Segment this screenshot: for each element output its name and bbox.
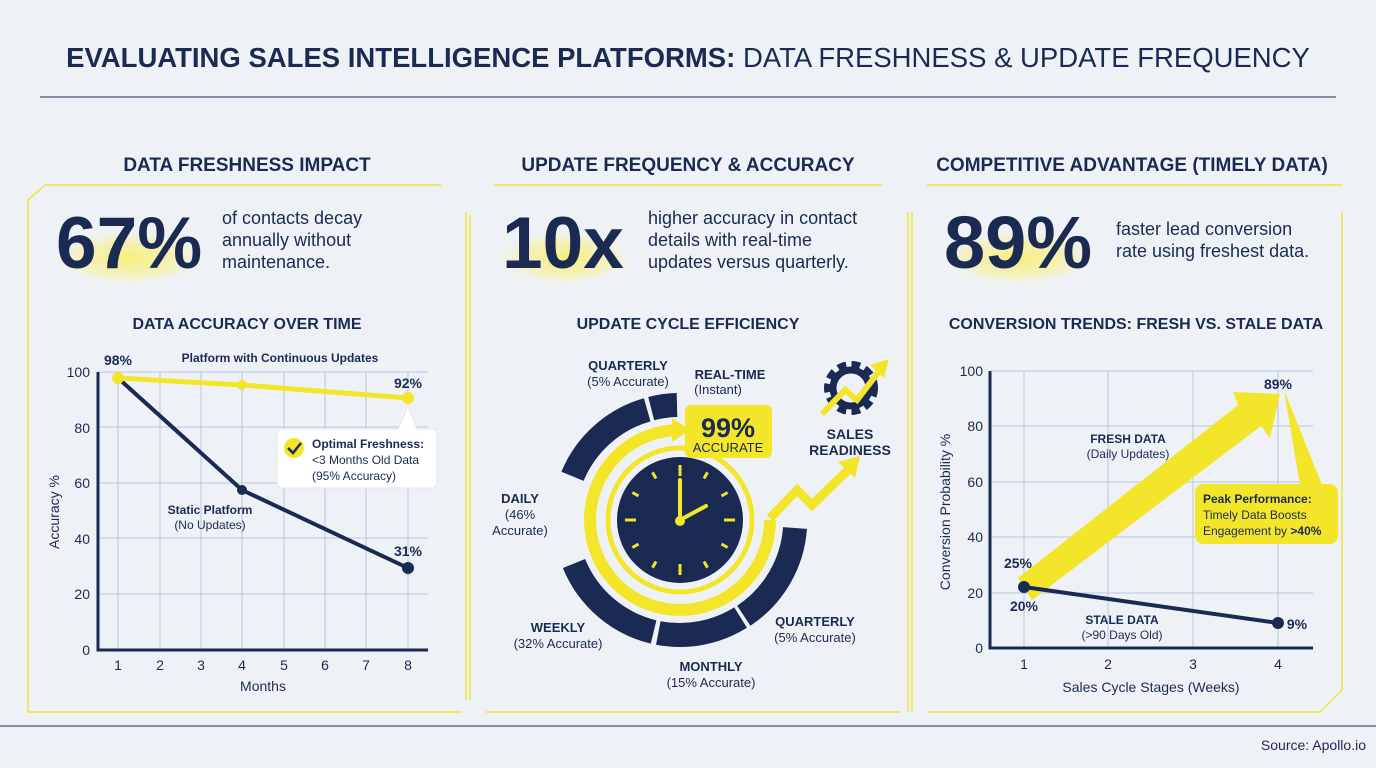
big stat 10x: 10x [502,203,624,284]
callout: 99% accurate: 99% [701,413,755,443]
line chart: accuracy over time: 1 [114,657,122,673]
radial chart: update cycle: MONTHLY [679,659,743,674]
icon: gear with rising arrow [809,359,891,458]
line chart: accuracy over time: 8 [404,657,412,673]
line chart: accuracy over time: Platform with Continuous Updates [182,351,379,365]
line chart: accuracy over time: 31% [394,543,423,559]
line chart: accuracy over time: 2 [156,657,164,673]
radial chart: update cycle: (Instant) [694,382,742,397]
line chart: conversion trends: 3 [1189,656,1197,672]
chart heading: CONVERSION TRENDS: FRESH VS. STALE DATA [949,316,1324,333]
line chart: accuracy over time: 7 [362,657,370,673]
panel: data freshness impact [45,155,437,694]
line chart: conversion trends: 60 [967,474,983,490]
line chart: accuracy over time: 98% [104,352,133,368]
line chart: accuracy over time: 60 [74,475,90,491]
stat description: higher accuracy in contact [648,208,857,228]
line chart: conversion trends: 20 [967,585,983,601]
radial chart: update cycle: (5% Accurate) [587,374,669,389]
callout: optimal freshness [277,406,437,488]
callout: peak performance [1195,390,1338,544]
line chart: conversion trends: (Daily Updates) [1087,447,1169,461]
line chart: conversion trends [937,363,1338,695]
line chart: conversion trends: 25% [1004,555,1033,571]
line chart: accuracy over time [46,351,437,694]
radial chart: update cycle: DAILY [501,491,539,506]
line chart: conversion trends: 100 [960,363,983,379]
line chart: accuracy over time: Static Platform [168,503,252,517]
line chart: conversion trends: 40 [967,529,983,545]
line chart: accuracy over time: 4 [238,657,246,673]
heading: competitive advantage: COMPETITIVE ADVANTAGE (TIMELY DATA) [936,155,1328,176]
callout: optimal freshness: (95% Accuracy) [312,469,396,483]
stat description: of contacts decay [222,208,362,228]
radial chart: update cycle: REAL-TIME [695,367,766,382]
line chart: accuracy over time: 80 [74,420,90,436]
line chart: conversion trends: (>90 Days Old) [1081,628,1163,642]
callout: peak performance: Timely Data Boosts [1203,508,1307,522]
line chart: conversion trends: Sales Cycle Stages (Weeks) [1062,679,1240,695]
callout: optimal freshness: <3 Months Old Data [312,453,419,467]
radial chart: update cycle: (46% [505,507,536,522]
line chart: conversion trends: STALE DATA [1085,613,1159,627]
line chart: conversion trends: 80 [967,418,983,434]
panel: competitive advantage [933,155,1338,695]
radial chart: update cycle: WEEKLY [531,620,586,635]
callout: optimal freshness: Optimal Freshness: [312,437,424,451]
line chart: accuracy over time: Accuracy % [46,475,62,549]
stat description: faster lead conversion [1116,219,1292,239]
stat description: annually without [222,230,351,250]
panel: update frequency & accuracy [490,155,891,690]
radial chart: update cycle: Accurate) [492,523,548,538]
radial chart: update cycle: QUARTERLY [775,614,855,629]
icon: gear with rising arrow: SALES [827,426,873,442]
big stat 89%: 89% [944,201,1092,284]
callout: 99% accurate: ACCURATE [693,440,764,455]
line chart: conversion trends: FRESH DATA [1090,432,1166,446]
callout: peak performance: Engagement by >40% [1203,524,1321,538]
line chart: accuracy over time: 0 [82,642,90,658]
line chart: accuracy over time: Months [240,678,286,694]
chart heading: DATA ACCURACY OVER TIME [132,316,362,333]
line chart: conversion trends: 89% [1264,376,1293,392]
radial chart: update cycle: QUARTERLY [588,358,668,373]
chart heading: UPDATE CYCLE EFFICIENCY [577,316,800,333]
line chart: accuracy over time: 6 [321,657,329,673]
line chart: conversion trends: 4 [1274,656,1282,672]
radial chart: update cycle [492,358,860,690]
radial chart: update cycle: (32% Accurate) [514,636,602,651]
source note: Source: Apollo.io [1261,737,1366,753]
radial chart: update cycle: (15% Accurate) [667,675,755,690]
line chart: accuracy over time: 5 [280,657,288,673]
line chart: conversion trends: 20% [1010,598,1039,614]
radial chart: update cycle: (5% Accurate) [774,630,856,645]
line chart: conversion trends: 2 [1104,656,1112,672]
stat description: maintenance. [222,252,330,272]
heading: update frequency: UPDATE FREQUENCY & ACCURACY [521,155,855,176]
line chart: accuracy over time: 40 [74,531,90,547]
line chart: accuracy over time: 20 [74,586,90,602]
callout: peak performance: Peak Performance: [1203,492,1312,506]
stat description: rate using freshest data. [1116,241,1309,261]
stat description: details with real-time [648,230,812,250]
big stat 67%: 67% [56,203,202,284]
line chart: accuracy over time: 3 [197,657,205,673]
line chart: accuracy over time: (No Updates) [174,518,246,532]
icon: gear with rising arrow: READINESS [809,442,891,458]
line chart: conversion trends: 9% [1287,616,1308,632]
line chart: accuracy over time: 92% [394,375,423,391]
heading: data freshness impact: DATA FRESHNESS IMPACT [123,155,371,176]
line chart: conversion trends: 0 [975,640,983,656]
line chart: conversion trends: Conversion Probability % [937,434,953,590]
callout: 99% accurate [685,405,772,458]
stat description: updates versus quarterly. [648,252,849,272]
title: EVALUATING SALES INTELLIGENCE PLATFORMS: DATA FRESHNESS & UPDATE FREQUENCY [66,42,1310,73]
line chart: conversion trends: 1 [1020,656,1028,672]
line chart: accuracy over time: 100 [67,364,90,380]
